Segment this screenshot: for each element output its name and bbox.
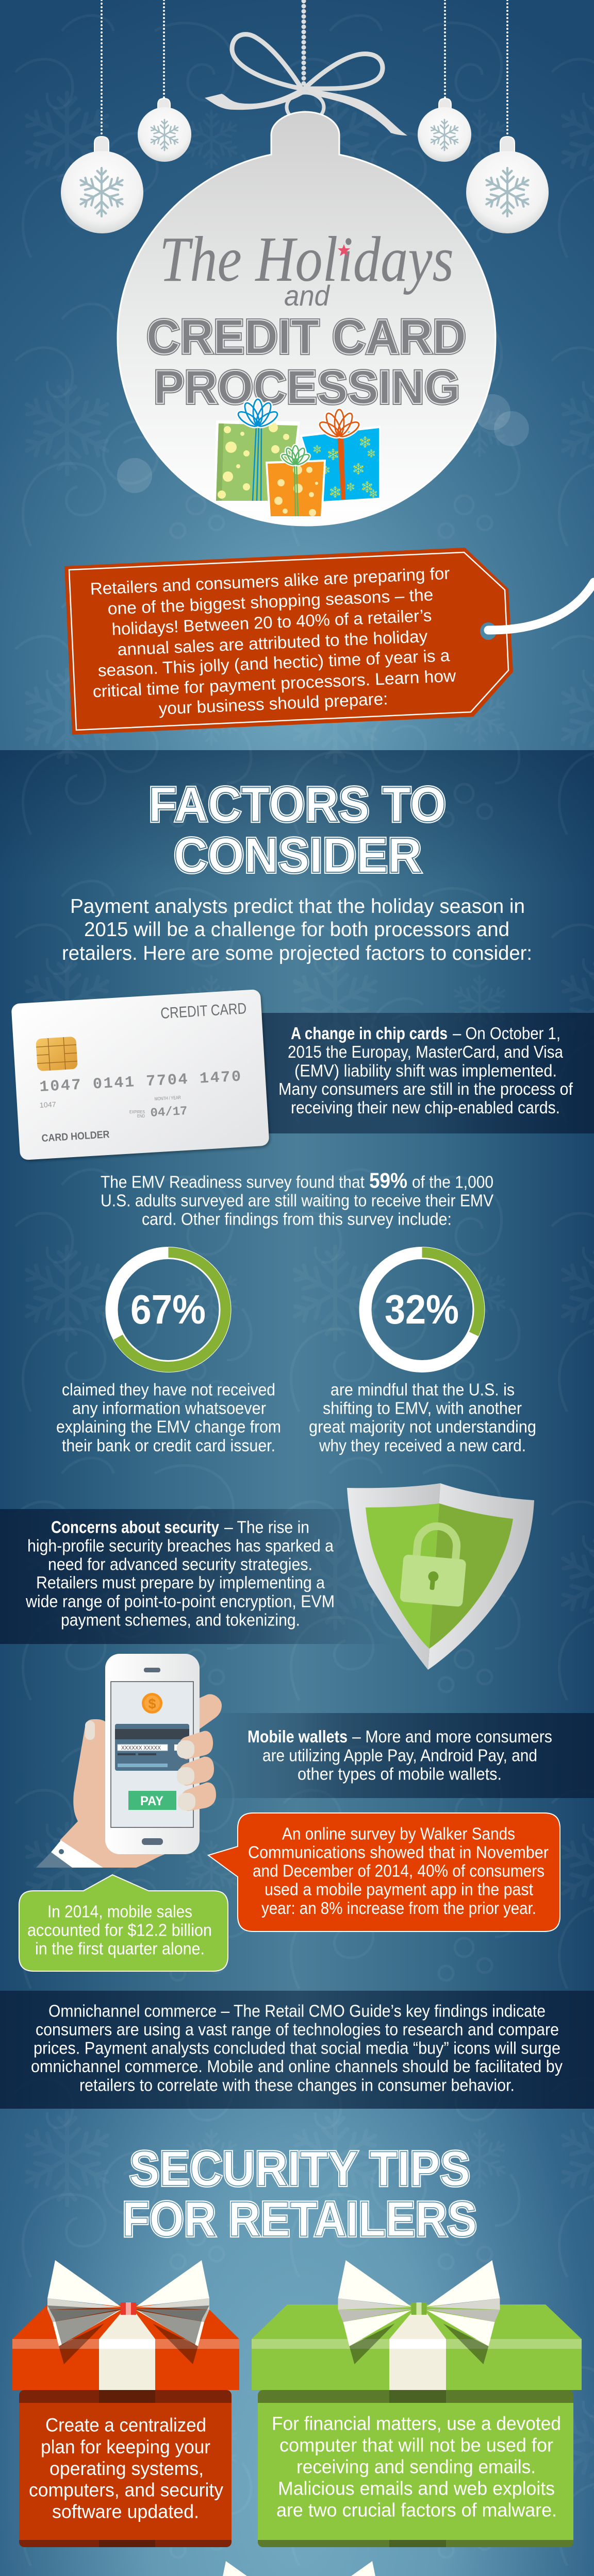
background: intro section bbox=[0, 0, 594, 750]
gift text: computers, and security bbox=[29, 2479, 223, 2501]
text: concerns about security bbox=[25, 1518, 335, 1629]
title script line: The Holidays bbox=[159, 224, 454, 295]
text: 67% caption: any information whatsoever bbox=[72, 1398, 266, 1418]
panel: mobile wallets band bbox=[206, 1713, 594, 1798]
gift bow bbox=[338, 2260, 500, 2364]
fingers bbox=[177, 1731, 216, 1811]
text: EMV readiness survey: The EMV Readiness survey found that bbox=[101, 1173, 365, 1191]
intro paragraph: factors: retailers. Here are some projected factors to consider: bbox=[62, 942, 532, 964]
icon: security shield bbox=[347, 1483, 534, 1670]
gift text: Create a centralized bbox=[45, 2414, 206, 2436]
callout: mobile sales: in the first quarter alone. bbox=[35, 1939, 205, 1958]
text: chip card change: 2015 the Europay, MasterCard, and Visa bbox=[288, 1042, 564, 1061]
gift text: receiving and sending emails. bbox=[296, 2456, 536, 2477]
text: chip card change: – On October 1, bbox=[453, 1024, 560, 1043]
sleeve bbox=[36, 1852, 72, 1868]
heading: security tips for retailers: FOR RETAILERS bbox=[122, 2192, 477, 2247]
icon: credit card bbox=[11, 989, 270, 1160]
intro paragraph: factors bbox=[62, 895, 532, 964]
text: omnichannel commerce: retailers to correlate with these changes in consumer behavior. bbox=[79, 2075, 515, 2095]
tag string bbox=[488, 582, 594, 630]
heading: factors to consider bbox=[148, 777, 446, 883]
text: concerns about security: wide range of point-to-point encryption, EVM bbox=[25, 1592, 335, 1611]
pay button bbox=[128, 1791, 176, 1810]
tag text: annual sales are attributed to the holiday bbox=[117, 626, 428, 659]
text: 67% caption bbox=[56, 1380, 281, 1455]
tag shape bbox=[64, 548, 513, 735]
chart: 32% donut bbox=[365, 1252, 480, 1367]
gift text: are two crucial factors of malware. bbox=[276, 2500, 557, 2520]
text: chip card change bbox=[278, 1024, 573, 1117]
title star accent bbox=[338, 244, 350, 256]
ornament ribbon bow bbox=[205, 35, 407, 135]
main ornament with title bbox=[118, 1, 496, 526]
phone body bbox=[105, 1654, 200, 1854]
text: concerns about security: payment schemes, and tokenizing. bbox=[61, 1611, 300, 1629]
chart: 67% donut: 67% bbox=[130, 1286, 206, 1332]
text: 32% caption: great majority not understanding bbox=[309, 1417, 536, 1436]
card chip bbox=[36, 1037, 78, 1071]
callout: walker sands survey: Communications showed that in November bbox=[248, 1842, 549, 1862]
title processing: PROCESSING bbox=[154, 361, 460, 414]
text: concerns about security: need for advanced security strategies. bbox=[48, 1555, 312, 1573]
icon: gift boxes bbox=[214, 399, 381, 517]
gift text: Malicious emails and web exploits bbox=[278, 2478, 555, 2499]
text: EMV readiness survey: U.S. adults surveyed are still waiting to receive their EMV bbox=[101, 1191, 493, 1210]
hanging ornaments bbox=[61, 0, 549, 233]
text: 67% caption: claimed they have not received bbox=[62, 1380, 275, 1399]
text: concerns about security: Concerns about security bbox=[51, 1518, 220, 1536]
chart: 32% donut: 32% bbox=[385, 1286, 459, 1332]
text: EMV readiness survey: card. Other findings from this survey include: bbox=[142, 1210, 452, 1228]
panel: omnichannel band bbox=[0, 1991, 594, 2109]
tag text bbox=[90, 564, 456, 718]
heading: factors to consider: CONSIDER bbox=[174, 828, 422, 883]
tag text: your business should prepare: bbox=[158, 689, 388, 718]
phone home button bbox=[142, 1838, 163, 1845]
heading: factors to consider: FACTORS TO bbox=[148, 777, 446, 832]
text: mobile wallets: – More and more consumers bbox=[352, 1727, 552, 1746]
tag text: Retailers and consumers alike are preparing for bbox=[90, 564, 450, 598]
ornament: small right bbox=[418, 0, 471, 162]
panel: gift tip devoted computer bbox=[252, 2260, 582, 2547]
decorative bokeh lights bbox=[117, 394, 529, 493]
heading: factors to consider: FACTORS TO bbox=[148, 777, 446, 832]
gift text: For financial matters, use a devoted bbox=[272, 2413, 561, 2434]
tag hole bbox=[480, 622, 497, 640]
phone speaker bbox=[144, 1668, 160, 1672]
callout: mobile sales: In 2014, mobile sales bbox=[47, 1902, 192, 1921]
tag text: one of the biggest shopping seasons – the bbox=[107, 585, 434, 618]
heading: factors to consider: CONSIDER bbox=[174, 828, 422, 883]
gift text: operating systems, bbox=[50, 2458, 204, 2479]
ornament: far right bbox=[466, 0, 549, 233]
panel: gift tip passwords bbox=[96, 2561, 498, 2576]
back finger bbox=[196, 1694, 222, 1729]
ornament body bbox=[118, 112, 496, 526]
background: factors section bbox=[0, 750, 594, 2109]
icon: hand holding phone bbox=[36, 1654, 222, 1868]
coin: $ bbox=[148, 1696, 156, 1711]
cuff bbox=[51, 1840, 103, 1868]
text: omnichannel commerce: omnichannel commerce. Mobile and online channels should be facilitated by bbox=[31, 2057, 563, 2076]
text: 32% caption: why they received a new card. bbox=[319, 1436, 526, 1455]
ornament: far left bbox=[61, 0, 143, 233]
on-screen card: XXXXXX XXXXX bbox=[121, 1745, 161, 1751]
text: 67% caption: explaining the EMV change from bbox=[56, 1417, 281, 1436]
panel: chip card band bbox=[262, 1013, 594, 1133]
card label: CREDIT CARD bbox=[160, 1000, 247, 1022]
on-screen card bbox=[115, 1724, 189, 1771]
intro paragraph: factors: Payment analysts predict that the holiday season in bbox=[70, 895, 525, 918]
title and: and bbox=[284, 279, 331, 312]
gift bows bbox=[236, 399, 361, 466]
text: concerns about security: high-profile security breaches has sparked a bbox=[27, 1536, 334, 1555]
text: chip card change: (EMV) liability shift was implemented. bbox=[294, 1061, 557, 1080]
text: mobile wallets: are utilizing Apple Pay, Android Pay, and bbox=[262, 1745, 537, 1765]
card expires bbox=[129, 1110, 145, 1118]
gift text bbox=[29, 2414, 223, 2522]
intro luggage tag bbox=[64, 548, 594, 735]
text: concerns about security: – The rise in bbox=[224, 1518, 309, 1536]
gift text: plan for keeping your bbox=[41, 2436, 210, 2458]
text: omnichannel commerce: prices. Payment analysts concluded that social media “buy” icons will surge bbox=[34, 2038, 560, 2058]
ornament chain bbox=[301, 1, 306, 89]
phone screen bbox=[111, 1682, 193, 1827]
gift text: software updated. bbox=[52, 2501, 199, 2522]
callout: mobile sales bbox=[19, 1875, 228, 1971]
title processing: PROCESSING bbox=[154, 361, 460, 414]
title credit card: CREDIT CARD bbox=[146, 310, 466, 364]
text: 32% caption: shifting to EMV, with another bbox=[323, 1398, 522, 1418]
heading: security tips for retailers: FOR RETAILERS bbox=[122, 2192, 477, 2247]
background: security tips section bbox=[0, 2109, 594, 2576]
palm and thumb bbox=[60, 1719, 165, 1868]
padlock bbox=[400, 1523, 469, 1607]
ornament: small left bbox=[138, 0, 191, 162]
gift text bbox=[272, 2413, 561, 2520]
gift bow bbox=[218, 2561, 380, 2576]
gift bow bbox=[47, 2260, 209, 2364]
title credit card: CREDIT CARD bbox=[146, 310, 466, 364]
callout: walker sands survey: An online survey by Walker Sands bbox=[282, 1824, 515, 1843]
text: EMV readiness survey: 59% bbox=[369, 1168, 407, 1192]
text: omnichannel commerce: Omnichannel commerce – The Retail CMO Guide’s key findings indicate bbox=[48, 2001, 546, 2021]
pay button: PAY bbox=[140, 1794, 163, 1808]
tag inner border bbox=[69, 552, 508, 730]
card expiry date: 04/17 bbox=[150, 1105, 188, 1121]
tag text: holidays! Between 20 to 40% of a retailer’s bbox=[111, 606, 432, 639]
ornament ring bbox=[287, 93, 324, 122]
text: EMV readiness survey: of the 1,000 bbox=[412, 1173, 493, 1191]
orange gift bbox=[266, 460, 326, 517]
tag text: critical time for payment processors. Learn how bbox=[92, 666, 456, 701]
card holder: CARD HOLDER bbox=[41, 1129, 110, 1144]
card expires: EXPIRES bbox=[129, 1110, 145, 1114]
card month year: MONTH / YEAR bbox=[155, 1095, 181, 1101]
heading: security tips for retailers: SECURITY TIPS bbox=[129, 2141, 470, 2196]
callout: walker sands survey: and December of 2014, 40% of consumers bbox=[253, 1861, 544, 1880]
green gift bbox=[214, 420, 300, 503]
text: EMV readiness survey bbox=[101, 1168, 493, 1228]
card body bbox=[11, 989, 270, 1160]
background: factors section top shade bbox=[0, 750, 594, 884]
callout: walker sands survey: used a mobile payment app in the past bbox=[265, 1879, 533, 1899]
text: chip card change: A change in chip cards bbox=[291, 1024, 448, 1043]
text: concerns about security: Retailers must prepare by implementing a bbox=[36, 1573, 325, 1592]
callout: mobile sales: accounted for $12.2 billion bbox=[27, 1921, 212, 1939]
text: chip card change: receiving their new chip-enabled cards. bbox=[291, 1098, 560, 1117]
card small number: 1047 bbox=[39, 1100, 56, 1109]
text: mobile wallets bbox=[248, 1727, 552, 1784]
intro paragraph: factors: 2015 will be a challenge for both processors and bbox=[84, 919, 509, 941]
panel: gift tip centralized plan bbox=[12, 2260, 239, 2547]
heading: security tips for retailers: SECURITY TIPS bbox=[129, 2141, 470, 2196]
text: 32% caption: are mindful that the U.S. is bbox=[331, 1380, 515, 1399]
blue gift bbox=[300, 426, 381, 504]
coin bbox=[142, 1693, 162, 1714]
text: omnichannel commerce bbox=[31, 2001, 563, 2095]
thumb nail bbox=[85, 1721, 95, 1740]
card expires: END bbox=[137, 1114, 145, 1118]
panel: security band bbox=[0, 1509, 392, 1644]
chart: 67% donut bbox=[111, 1252, 226, 1367]
text: 32% caption bbox=[309, 1380, 536, 1455]
text: mobile wallets: Mobile wallets bbox=[248, 1727, 348, 1746]
tag text: season. This jolly (and hectic) time of year is a bbox=[97, 646, 451, 680]
text: mobile wallets: other types of mobile wallets. bbox=[298, 1764, 502, 1784]
callout: walker sands survey: year: an 8% increase from the prior year. bbox=[261, 1899, 536, 1918]
heading: security tips for retailers bbox=[122, 2141, 477, 2247]
gift text: computer that will not be used for bbox=[279, 2435, 553, 2455]
callout: walker sands survey bbox=[208, 1813, 560, 1931]
text: 67% caption: their bank or credit card issuer. bbox=[62, 1436, 275, 1455]
text: chip card change: Many consumers are still in the process of bbox=[278, 1079, 573, 1098]
text: omnichannel commerce: consumers are using a vast range of technologies to research and compare bbox=[36, 2020, 559, 2039]
card number: 1047 0141 7704 1470 bbox=[39, 1069, 241, 1096]
